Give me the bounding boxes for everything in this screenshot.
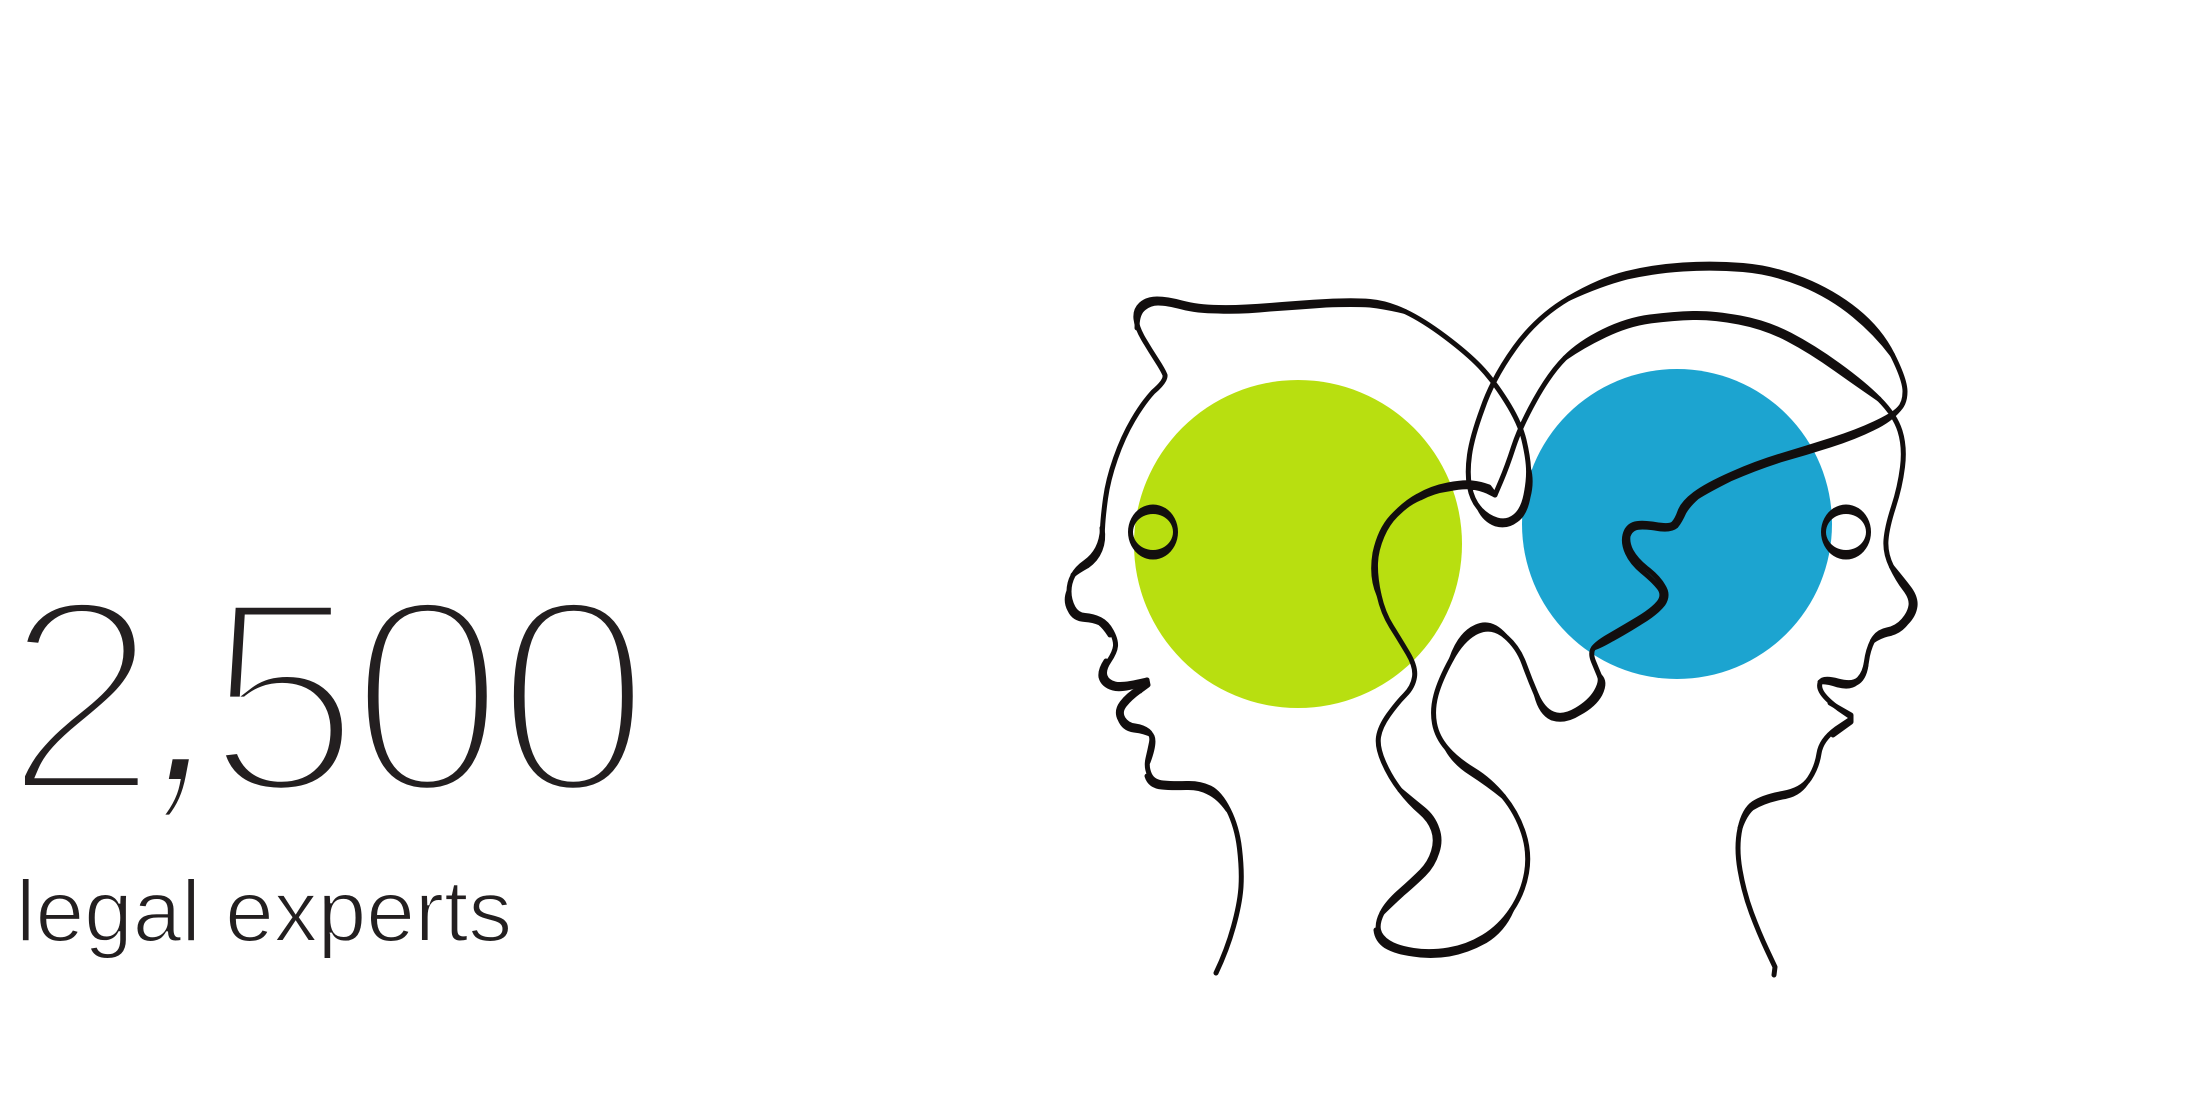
continuous contour (1069, 264, 1911, 975)
green circle (1134, 380, 1462, 708)
line swells: thick calligraphic sections (1067, 268, 1915, 956)
big number: 2,500: 0 (496, 540, 651, 851)
icon: right eye (1821, 504, 1871, 560)
big number: 2,500: 2 (4, 540, 159, 851)
line art: two interlocking head profiles (1067, 264, 1915, 975)
big number: 2,500: 0 (350, 540, 505, 851)
icon: left eye (1128, 504, 1178, 559)
blue circle (1522, 369, 1832, 679)
big number: 2,500: 5 (206, 540, 361, 851)
caption: legal experts: legal experts (16, 862, 512, 960)
big number: 2,500: , (150, 532, 227, 843)
